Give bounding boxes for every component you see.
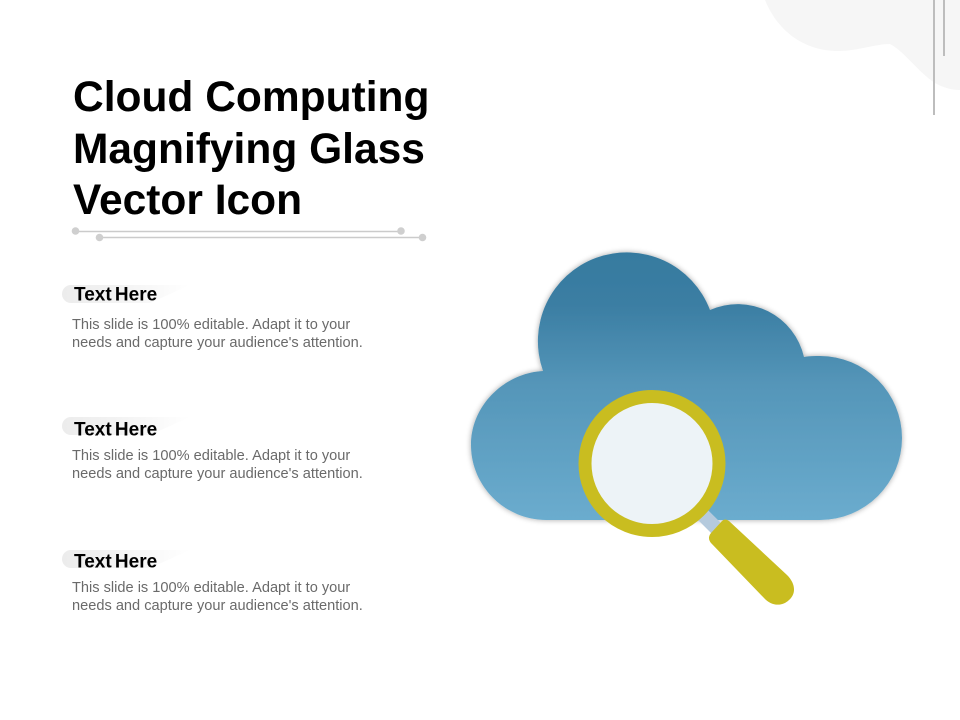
title bbox=[73, 74, 429, 224]
heading pill 2 bbox=[62, 417, 190, 435]
heading 2: Text Here bbox=[74, 420, 157, 440]
body text 2: This slide is 100% editable. Adapt it to your bbox=[72, 448, 350, 464]
text block 2 bbox=[62, 417, 363, 482]
title: Cloud Computing bbox=[73, 74, 429, 121]
icon: cloud with magnifying glass bbox=[471, 252, 902, 605]
title: Vector Icon bbox=[73, 177, 302, 224]
title: Magnifying Glass bbox=[73, 126, 425, 173]
body text 3: needs and capture your audience's attention. bbox=[72, 598, 363, 614]
cloud bbox=[471, 252, 902, 520]
magnifier handle bbox=[709, 520, 794, 605]
title divider bbox=[72, 227, 426, 241]
body text 1: This slide is 100% editable. Adapt it to your bbox=[72, 317, 350, 333]
body text 2: needs and capture your audience's attention. bbox=[72, 466, 363, 482]
magnifier neck bbox=[700, 512, 718, 530]
body text 3: This slide is 100% editable. Adapt it to your bbox=[72, 580, 350, 596]
magnifier lens bbox=[585, 396, 719, 530]
text block 1 bbox=[62, 284, 363, 351]
corner lines bbox=[933, 0, 945, 115]
heading 3: Text Here bbox=[74, 552, 157, 572]
body text 1: needs and capture your audience's attention. bbox=[72, 335, 363, 351]
heading 1: Text Here bbox=[74, 284, 157, 306]
decorative corner blob bbox=[765, 0, 960, 90]
text block 3 bbox=[62, 550, 363, 614]
heading pill 3 bbox=[62, 550, 190, 568]
heading pill 1 bbox=[62, 285, 190, 303]
